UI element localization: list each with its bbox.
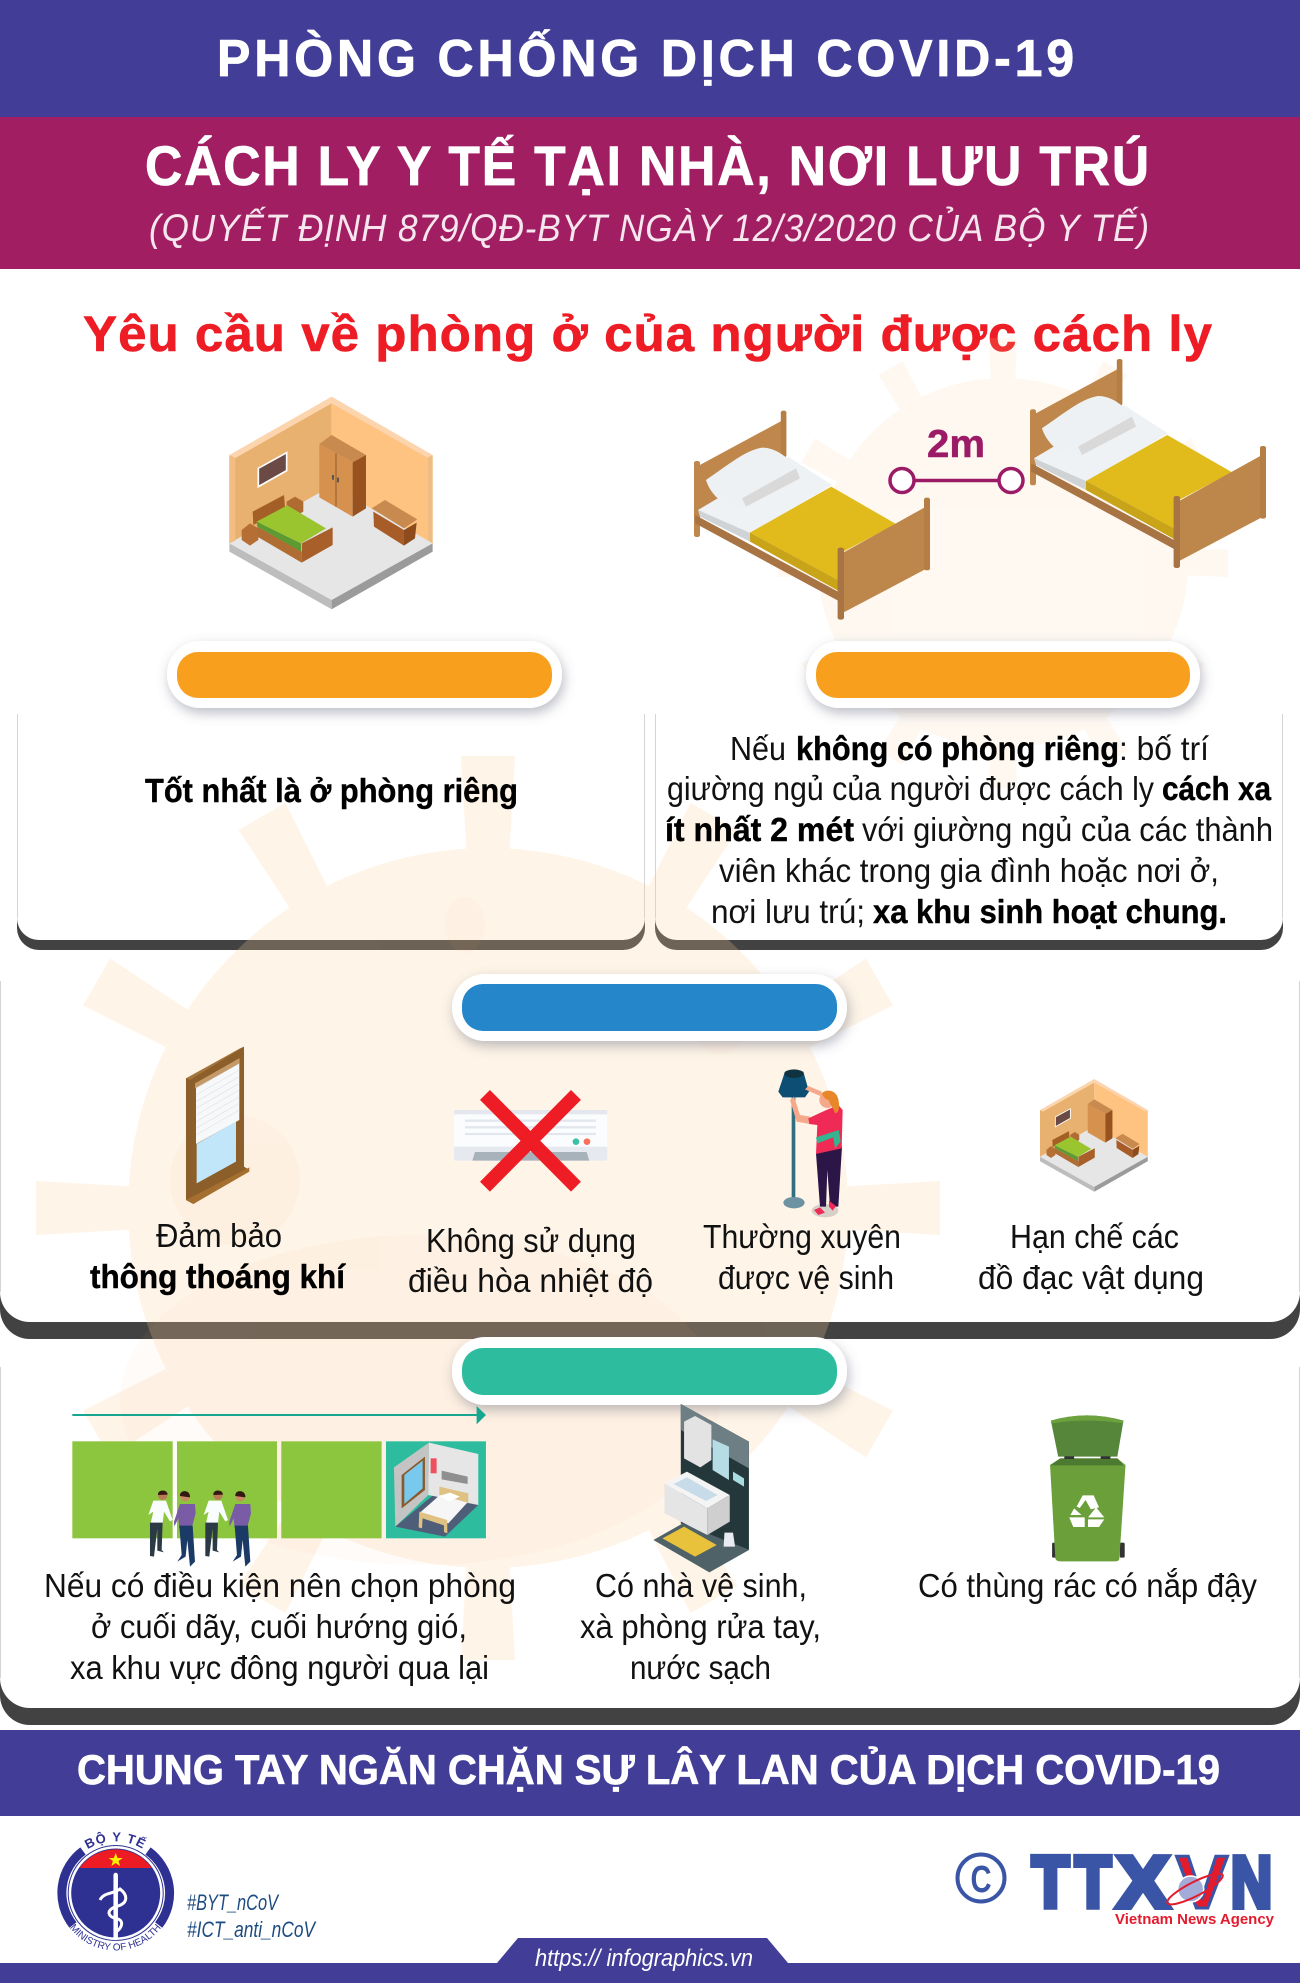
title: PHÒNG CHỐNG DỊCH COVID-19 (217, 29, 1078, 88)
subtitle heading: CÁCH LY Y TẾ TẠI NHÀ, NƠI LƯU TRÚ (145, 134, 1151, 197)
text: no air conditioning: Không sử dụng (426, 1222, 636, 1259)
logo: copyright mark (958, 1854, 1004, 1902)
icon: small isometric bedroom (1040, 1079, 1148, 1192)
text: end-of-corridor room (44, 1567, 516, 1686)
icon: bed left (694, 411, 930, 620)
logo: TTXVN: T (1032, 1843, 1069, 1923)
panel: shared room card (655, 714, 1283, 950)
decision reference: (QUYẾT ĐỊNH 879/QĐ-BYT NGÀY 12/3/2020 CỦA BỘ Y TẾ) (149, 205, 1150, 250)
rooms row (72, 1441, 486, 1538)
label pill: orange left (167, 641, 562, 708)
text: shared room instructions: cách xa (1162, 770, 1272, 807)
bottom band with url tab (0, 1938, 1300, 1983)
text: limit furniture: đồ đạc vật dụng (978, 1259, 1204, 1296)
logo: TTXVN (1032, 1840, 1275, 1928)
text: shared room instructions: không có phòng riêng (796, 730, 1119, 767)
distance marker: 2m (890, 423, 1023, 492)
text: shared room instructions: nơi lưu trú; (711, 893, 865, 930)
background virus: shading (120, 897, 744, 1565)
people group (148, 1490, 251, 1567)
text: shared room instructions: viên khác trong gia đình hoặc nơi ở, (719, 852, 1219, 889)
logo: ministry of health (57, 1832, 174, 1950)
logo: TTXVN: Vietnam News Agency (1115, 1911, 1275, 1928)
text: shared room instructions: xa khu sinh hoạt chung. (873, 893, 1227, 930)
text: limit furniture: Hạn chế các (1010, 1218, 1179, 1255)
text: bathroom (580, 1567, 821, 1686)
background virus: small (778, 338, 1228, 788)
text: regular cleaning: Thường xuyên (703, 1218, 901, 1255)
text: shared room instructions: : bố trí (1119, 730, 1209, 767)
text: shared room instructions (665, 730, 1273, 930)
slogan band (0, 1730, 1300, 1816)
text: bathroom: nước sạch (630, 1649, 771, 1686)
logo: ministry of health: BỘ Y TẾ (84, 1832, 148, 1849)
icon: bed right (1030, 359, 1266, 568)
icon: woman cleaning lamp (778, 1069, 843, 1217)
text: no air conditioning (408, 1222, 653, 1299)
text: bathroom: xà phòng rửa tay, (580, 1608, 821, 1645)
text: ventilation (90, 1217, 347, 1295)
panel: facilities card (0, 1367, 1300, 1725)
icon: isometric bedroom (229, 397, 433, 609)
distance marker: 2m: 2m (927, 423, 985, 466)
slogan: CHUNG TAY NGĂN CHẶN SỰ LÂY LAN CỦA DỊCH COVID-19 (77, 1745, 1220, 1793)
icon: bathroom (653, 1404, 749, 1572)
panel: room conditions card (0, 981, 1300, 1339)
label pill: orange right (806, 641, 1200, 708)
logo: TTXVN: N (1231, 1843, 1272, 1923)
logo: copyright mark: C (970, 1859, 992, 1901)
text: regular cleaning (703, 1218, 901, 1296)
text: ventilation: Đảm bảo (156, 1217, 282, 1254)
hashtags: #ICT_anti_nCoV (187, 1917, 317, 1942)
logo: ministry of health: MINISTRY OF HEALTH (70, 1924, 161, 1950)
background virus: large (36, 756, 940, 1660)
text: shared room instructions: giường ngủ của người được cách ly (667, 770, 1154, 807)
hashtags: #BYT_nCoV (187, 1890, 280, 1915)
hashtags (187, 1890, 317, 1942)
text: end-of-corridor room: Nếu có điều kiện nên chọn phòng (44, 1567, 516, 1604)
recycling symbol (1069, 1495, 1104, 1527)
text: shared room instructions: Nếu (730, 730, 786, 767)
top banner (0, 0, 1300, 117)
label pill: blue (452, 974, 847, 1041)
text: bathroom: Có nhà vệ sinh, (595, 1567, 807, 1604)
logo: TTXVN: V (1176, 1840, 1228, 1924)
text: limit furniture (978, 1218, 1204, 1296)
section heading: Yêu cầu về phòng ở của người được cách ly (83, 306, 1213, 362)
panel: private room card (17, 714, 645, 950)
text: no air conditioning: điều hòa nhiệt độ (408, 1262, 653, 1299)
text: end-of-corridor room: xa khu vực đông người qua lại (70, 1649, 489, 1686)
text: private room: Tốt nhất là ở phòng riêng (145, 772, 518, 809)
text: bin: Có thùng rác có nắp đậy (918, 1567, 1257, 1604)
text: regular cleaning: được vệ sinh (718, 1259, 894, 1296)
subtitle banner (0, 117, 1300, 269)
hospital room (394, 1443, 478, 1537)
arrow (72, 1406, 486, 1424)
text: shared room instructions: với giường ngủ của các thành (862, 811, 1273, 848)
icon: corridor with end room (72, 1406, 486, 1567)
label pill: teal (452, 1337, 847, 1405)
text: ventilation: thông thoáng khí (90, 1258, 347, 1295)
icon: crossed-out air conditioner (454, 1095, 607, 1187)
url: https:// infographics.vn (535, 1945, 753, 1972)
text: shared room instructions: ít nhất 2 mét (665, 811, 854, 848)
icon: window with blind (186, 1047, 249, 1204)
text: end-of-corridor room: ở cuối dãy, cuối hướng gió, (91, 1608, 467, 1645)
icon: recycling bin (1050, 1415, 1126, 1561)
logo: TTXVN: T (1075, 1843, 1111, 1923)
logo: TTXVN: X (1117, 1843, 1169, 1923)
